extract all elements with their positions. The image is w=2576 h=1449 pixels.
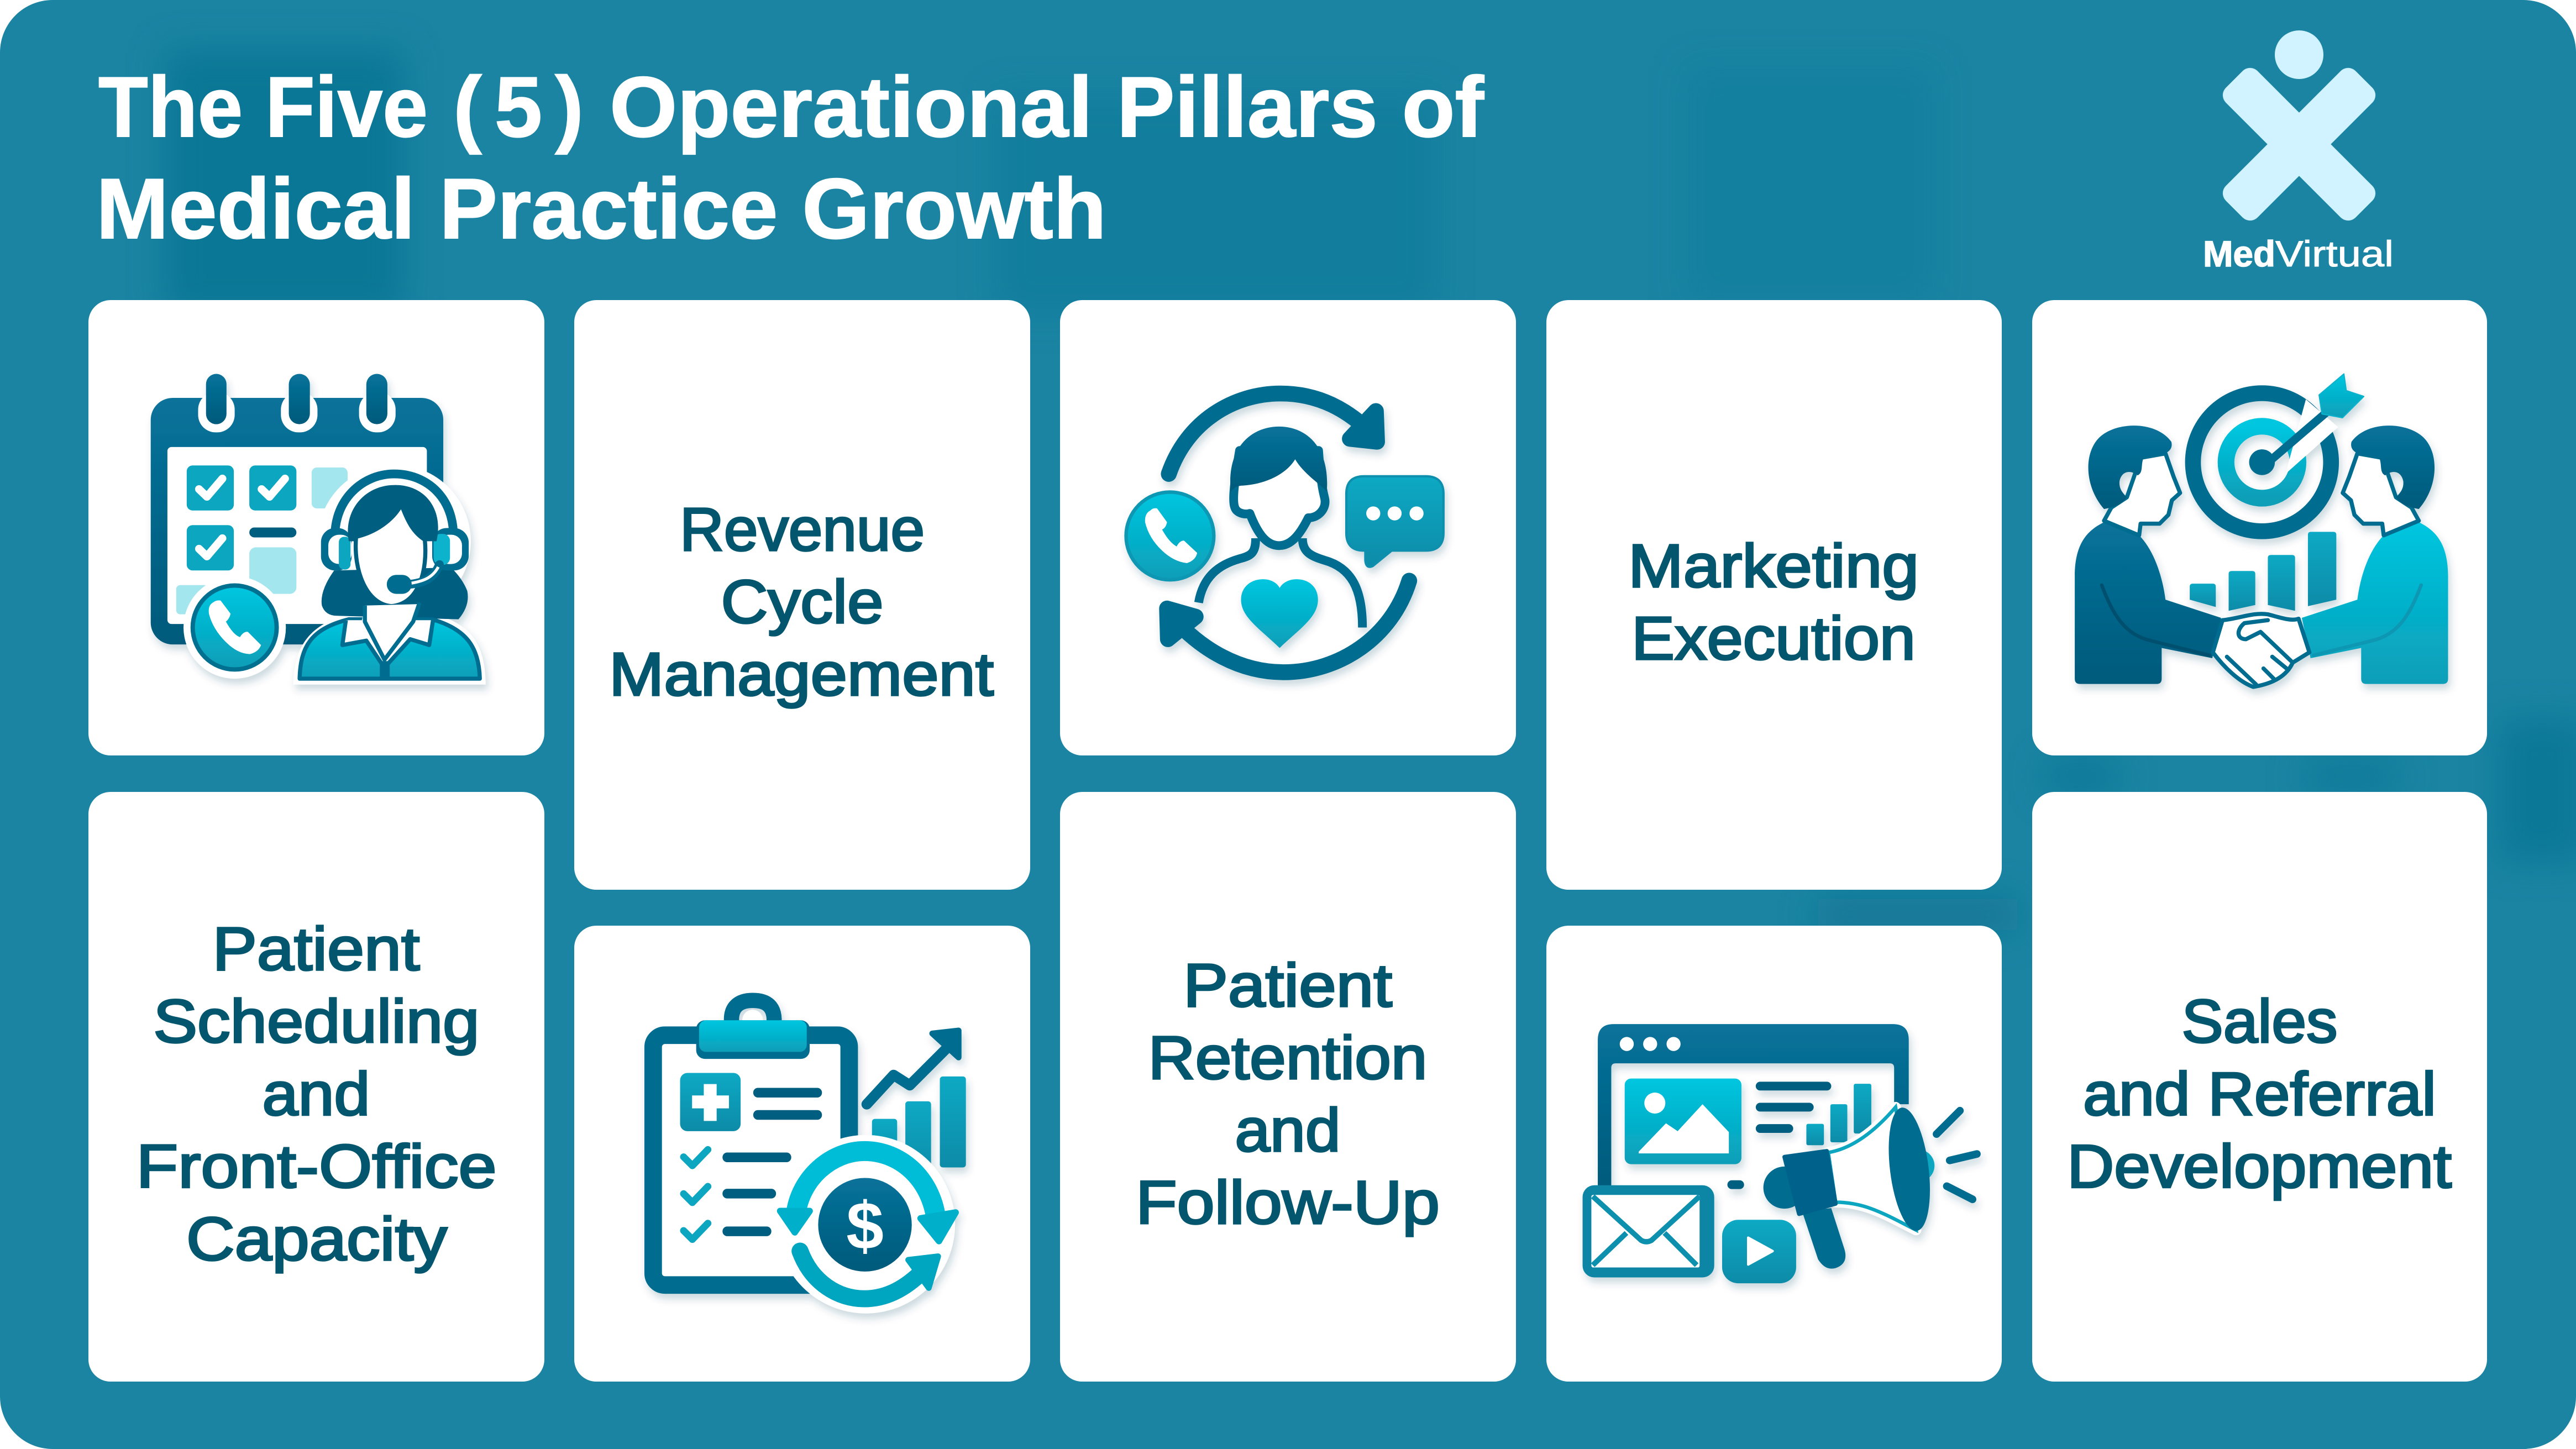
card: marketing icon	[1546, 926, 2002, 1382]
icon: clipboard and dollar cycle	[653, 1000, 966, 1314]
card: patient retention icon	[1060, 300, 1516, 755]
card: marketing text: Marketing	[1628, 532, 1919, 600]
card: patient scheduling text	[88, 792, 544, 1382]
card: revenue cycle text: Revenue	[680, 496, 925, 564]
card: sales icon	[2032, 300, 2487, 755]
card: patient retention text: Retention	[1148, 1024, 1427, 1092]
title	[96, 59, 1484, 256]
card: revenue cycle text: Management	[609, 641, 994, 708]
card: sales text: Development	[2067, 1133, 2452, 1200]
card: patient scheduling text: Scheduling	[154, 988, 480, 1056]
card: scheduling icon	[88, 300, 544, 755]
icon: handshake and target	[2075, 374, 2448, 687]
logo: MedVirtual: Med	[2203, 233, 2275, 274]
logo: MedVirtual	[2169, 14, 2429, 274]
card: sales text: Sales	[2182, 988, 2338, 1056]
card: marketing text: Execution	[1631, 605, 1916, 673]
card: revenue cycle text: Cycle	[721, 568, 883, 636]
card: patient retention text	[1060, 792, 1516, 1382]
card: patient scheduling text: Front-Office	[136, 1133, 496, 1200]
icon: patient retention cycle	[1126, 393, 1444, 672]
logo: MedVirtual: Virtual	[2275, 233, 2394, 274]
card: marketing text	[1546, 300, 2002, 890]
card: patient retention text: and	[1235, 1096, 1341, 1164]
card: patient retention text: Patient	[1183, 952, 1392, 1020]
card: sales text	[2032, 792, 2487, 1382]
card: revenue icon	[574, 926, 1030, 1382]
card: revenue cycle text	[574, 300, 1030, 890]
title: The Five	[98, 59, 428, 155]
card: patient scheduling text: Capacity	[186, 1205, 447, 1273]
title: (5)	[453, 59, 584, 155]
title: Medical Practice Growth	[96, 161, 1106, 256]
card: patient retention text: Follow-Up	[1136, 1169, 1440, 1237]
icon: calendar and receptionist	[151, 374, 486, 685]
card: patient scheduling text: Patient	[212, 915, 420, 983]
icon: browser, envelope and megaphone	[1583, 1024, 1977, 1283]
icon: clipboard and dollar cycle: $	[846, 1188, 884, 1263]
title: Operational Pillars of	[610, 59, 1484, 155]
card: sales text: and Referral	[2083, 1060, 2436, 1128]
card: patient scheduling text: and	[262, 1060, 370, 1128]
